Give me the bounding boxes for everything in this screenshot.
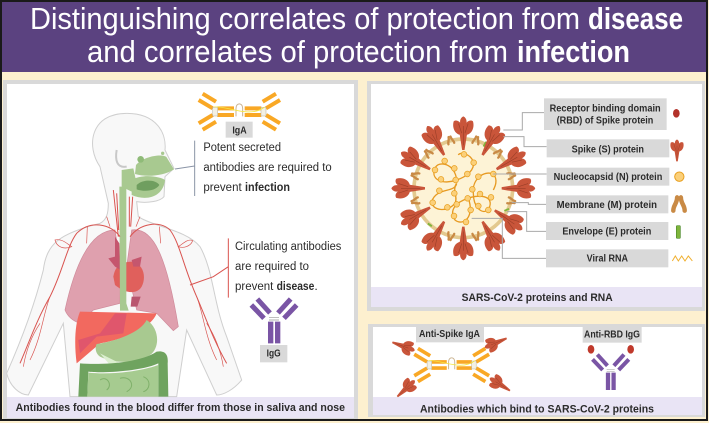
- label: Nucleocapsid protein: [547, 168, 669, 186]
- label: IgG: [260, 345, 287, 362]
- label: IgA: IgA: [232, 125, 247, 136]
- label: Spike protein: [547, 139, 669, 157]
- human body anatomy illustration: [7, 113, 242, 397]
- text: circulating antibodies: Circulating antibodies: [235, 239, 341, 253]
- icon: nucleocapsid: [675, 172, 684, 181]
- leader lines: [472, 113, 547, 258]
- text: secreted antibodies: Potent secreted: [203, 140, 281, 154]
- callout line: secreted antibodies: [175, 141, 195, 196]
- label: Envelope protein: [546, 222, 668, 240]
- icon: envelope protein: [676, 226, 680, 238]
- label: Viral RNA: Viral RNA: [587, 254, 628, 265]
- virus illustration: [391, 116, 535, 260]
- anti-RBD IgG with RBD: [588, 345, 634, 390]
- label: Envelope protein: Envelope (E) protein: [562, 227, 651, 238]
- label: Viral RNA: [546, 249, 668, 267]
- title banner: and correlates of protection from: [87, 34, 508, 69]
- label: IgG: IgG: [267, 349, 281, 360]
- text: circulating antibodies: are required to: [235, 259, 309, 273]
- anti-spike IgA with spikes: [390, 332, 514, 402]
- panel: SARS-CoV-2 proteins and RNA: [367, 81, 705, 311]
- text: secreted antibodies: infection: [245, 180, 290, 194]
- icon: IgG antibody: [251, 299, 297, 343]
- title banner: Distinguishing correlates of protection from: [30, 1, 580, 36]
- title banner: [2, 1, 707, 72]
- label: RBD: Receptor binding domain: [550, 103, 661, 114]
- label: Anti-RBD IgG: Anti-RBD IgG: [584, 329, 640, 340]
- text: secreted antibodies: antibodies are required to: [203, 160, 332, 174]
- label: Membrane protein: Membrane (M) protein: [557, 200, 657, 211]
- text: circulating antibodies: prevent: [235, 279, 274, 293]
- label: Nucleocapsid protein: Nucleocapsid (N) protein: [554, 172, 662, 183]
- panel: antibodies in blood vs saliva: [3, 80, 358, 420]
- icon: RNA: [672, 256, 692, 261]
- title banner: infection: [517, 34, 630, 69]
- icon: RBD: [673, 109, 680, 118]
- label: Anti-Spike IgA: [416, 327, 484, 342]
- label: IgA: [226, 122, 253, 138]
- text: circulating antibodies: .: [314, 279, 318, 293]
- callout line: circulating antibodies: [190, 238, 228, 298]
- text: secreted antibodies: [203, 140, 332, 194]
- caption: proteins and RNA: SARS-CoV-2 proteins and RNA: [462, 292, 613, 304]
- text: secreted antibodies: prevent: [203, 180, 242, 194]
- caption: blood vs saliva: Antibodies found in the blood differ from those in saliva and nose: [16, 402, 345, 414]
- label: Spike protein: Spike (S) protein: [572, 144, 644, 155]
- label: RBD: (RBD) of Spike protein: [557, 116, 653, 127]
- icon: spike: [670, 139, 684, 161]
- label: RBD: [544, 98, 667, 130]
- label: Anti-Spike IgA: Anti-Spike IgA: [419, 329, 480, 340]
- text: circulating antibodies: disease: [277, 279, 314, 293]
- icon: membrane protein: [673, 197, 685, 211]
- panel: antibodies binding proteins: [368, 324, 705, 417]
- caption: binding antibodies: Antibodies which bind to SARS-CoV-2 proteins: [420, 403, 654, 415]
- icon: IgA antibody: [199, 94, 280, 130]
- label: Anti-RBD IgG: [583, 327, 642, 343]
- text: circulating antibodies: [235, 239, 341, 293]
- title banner: disease: [588, 1, 683, 36]
- label: Membrane protein: [546, 195, 668, 213]
